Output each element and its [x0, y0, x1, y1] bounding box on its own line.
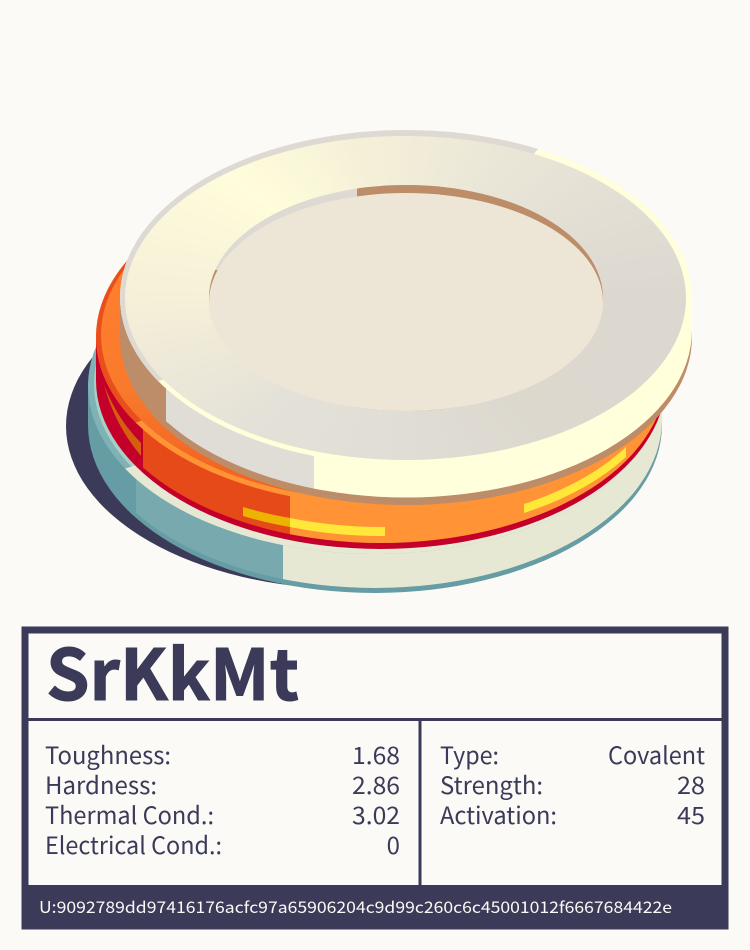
drop shadow — [66, 263, 634, 589]
properties right column — [440, 736, 705, 831]
top ring surface — [125, 136, 686, 460]
properties left column: Hardness: — [45, 766, 157, 801]
properties left column: Electrical Cond.: — [45, 826, 222, 861]
properties left column: Toughness: — [45, 736, 171, 771]
properties left column: 3.02 — [352, 796, 400, 831]
yellow band left bright — [290, 518, 385, 536]
properties right column: Strength: — [440, 766, 543, 801]
vertical divider — [418, 718, 422, 886]
infographic canvas — [22, 130, 728, 930]
properties right column: 28 — [677, 766, 705, 801]
properties left column: Thermal Cond.: — [45, 796, 214, 831]
properties right column: Activation: — [440, 796, 557, 831]
data card — [22, 620, 728, 929]
footer hash: U:9092789dd97416176acfc97a65906204c9d99c260c6c45001012f6667684422e — [39, 894, 672, 918]
crystal illustration — [66, 130, 692, 593]
card frame — [25, 630, 725, 926]
dark slot on red wall — [104, 385, 141, 456]
middle layer top surface — [96, 169, 666, 505]
properties right column: Covalent — [608, 736, 705, 771]
properties left column — [45, 736, 400, 861]
properties left column: 0 — [387, 826, 400, 861]
yellow band right — [524, 447, 626, 513]
horizontal divider — [28, 718, 722, 721]
properties right column: 45 — [677, 796, 705, 831]
footer bar — [22, 885, 728, 929]
hole wall — [209, 185, 603, 411]
yellow band left dim — [243, 507, 290, 527]
properties right column: Type: — [440, 736, 499, 771]
properties left column: 1.68 — [352, 736, 400, 771]
hole floor — [209, 193, 603, 411]
properties left column: 2.86 — [352, 766, 400, 801]
bottom teal layer — [88, 347, 662, 593]
middle orange layer — [96, 260, 660, 549]
top cream layer — [120, 130, 692, 505]
top rim — [120, 130, 692, 465]
title: SrKkMt — [46, 620, 299, 721]
